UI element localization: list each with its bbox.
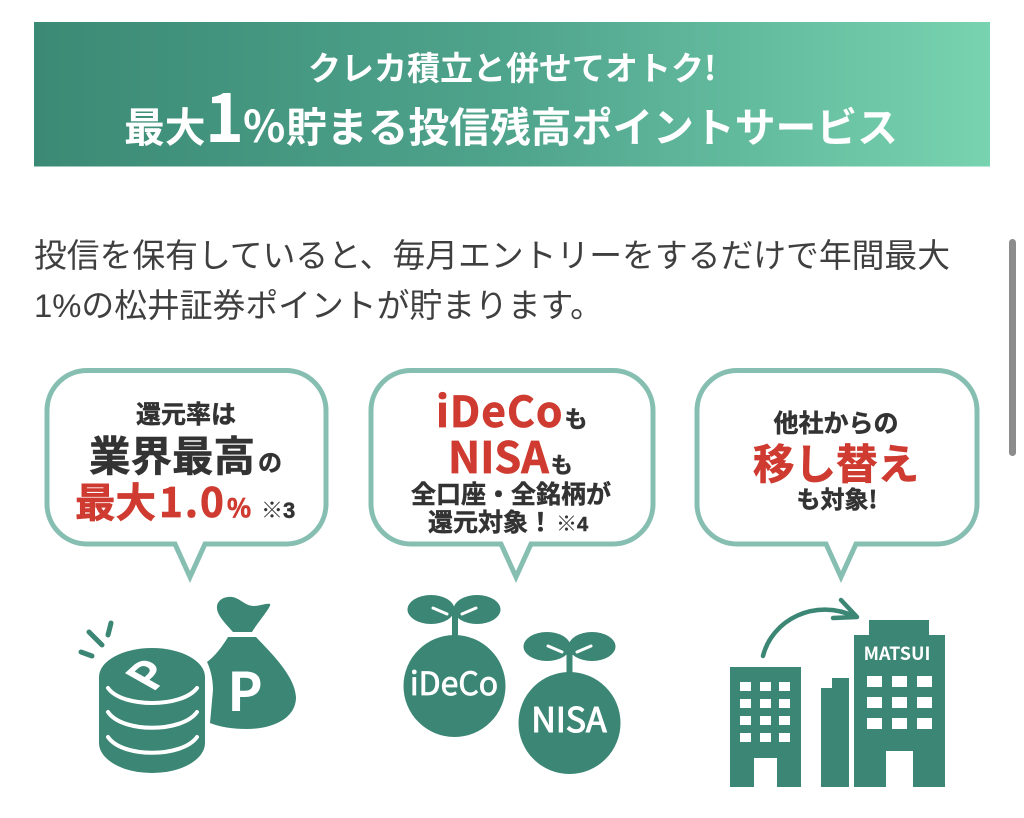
- scrollbar: [1009, 239, 1016, 456]
- icon: money bag: P: [227, 651, 263, 727]
- callout: iDeCo and NISA: [371, 370, 653, 577]
- callout: iDeCo and NISA: 還元対象！※4: [428, 509, 589, 537]
- icon: MATSUI building: MATSUI: [864, 640, 930, 666]
- callout: transfers from other brokers: 移し替え: [753, 441, 919, 488]
- arrow: [763, 600, 857, 656]
- callout: highest return rate: 還元率は: [136, 401, 236, 429]
- icon: middle building: [821, 678, 849, 787]
- callout: highest return rate: [47, 370, 326, 577]
- callout: iDeCo and NISA: iDeCoも: [436, 379, 588, 440]
- icon: points coins and money bag: [81, 597, 296, 773]
- icon: iDeCo sprout: iDeCo: [410, 659, 498, 705]
- icon: NISA sprout: [518, 632, 620, 774]
- callout: highest return rate: ※3: [261, 498, 295, 523]
- icon: money bag: [207, 597, 296, 729]
- icon: MATSUI building: [854, 620, 945, 787]
- callout: highest return rate: 業界最高の: [89, 433, 282, 480]
- banner title: 1: [205, 66, 244, 162]
- icon: coin stack: [99, 647, 205, 773]
- intro paragraph: 投信を保有していると、毎月エントリーをするだけで年間最大: [34, 237, 950, 274]
- icon: coin stack: P: [105, 647, 187, 700]
- banner title: 最大: [124, 95, 206, 154]
- icon: sparkle lines: [81, 623, 111, 656]
- intro paragraph: 1%の松井証券ポイントが貯まります。: [34, 287, 603, 324]
- icon: iDeCo sprout: [404, 595, 506, 737]
- header banner: [34, 22, 990, 166]
- icon: transfer to MATSUI building: [730, 600, 945, 787]
- banner title: %: [243, 91, 285, 155]
- icon: left building: [730, 667, 801, 787]
- banner title: 貯まる投信残高ポイントサービス: [286, 95, 898, 154]
- icon: NISA sprout: NISA: [531, 693, 607, 742]
- callout: iDeCo and NISA: NISAも: [448, 424, 573, 486]
- intro paragraph: [34, 237, 950, 324]
- callout: iDeCo and NISA: 全口座・全銘柄が: [411, 480, 611, 509]
- callout: transfers from other brokers: [697, 370, 977, 577]
- callout: transfers from other brokers: も対象!: [797, 480, 877, 515]
- icon: iDeCo and NISA sprouts: [404, 595, 620, 774]
- callout: highest return rate: 最大1.0%: [75, 470, 251, 529]
- banner subtitle: クレカ積立と併せてオトク!: [308, 42, 716, 90]
- callout: transfers from other brokers: 他社からの: [773, 410, 899, 438]
